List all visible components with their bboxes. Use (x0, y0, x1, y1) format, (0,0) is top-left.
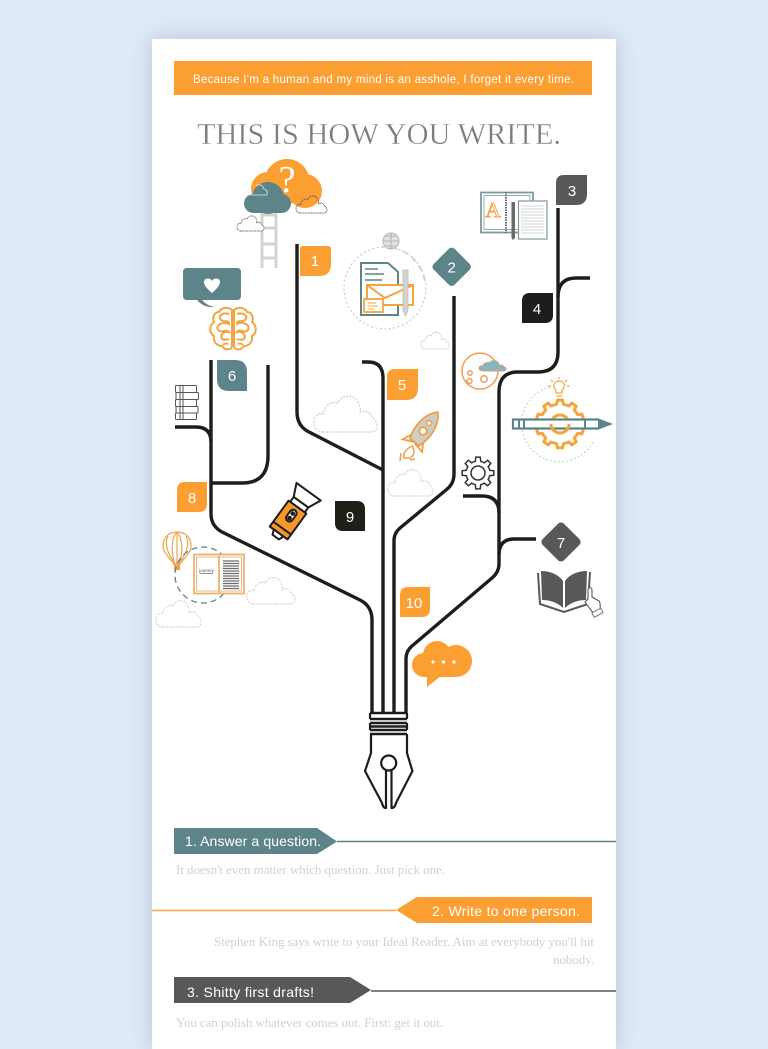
icon: notebook and paper (481, 192, 547, 240)
section 1 text: It doesn't even matter which question. Just pick one. (176, 862, 445, 877)
flag 4 (522, 293, 553, 323)
title: THIS IS HOW YOU WRITE. (197, 116, 561, 151)
icon: open book with hand (538, 571, 603, 617)
icon: brain (210, 308, 256, 349)
flag 1 (300, 246, 331, 276)
icon: small pale cloud (421, 332, 449, 349)
icon: flashlight (264, 483, 321, 546)
white card (152, 39, 616, 1049)
icon: hot air balloon (163, 532, 191, 570)
section 2 heading (152, 897, 592, 923)
flag 1: 1 (311, 253, 319, 270)
flag 5: 5 (398, 377, 406, 394)
section 2 text (214, 934, 594, 967)
icon: open journal in dashed circle: journey (198, 568, 215, 573)
section 1 heading (174, 828, 616, 854)
flag 8 (177, 482, 207, 512)
section 1 heading: 1. Answer a question. (185, 833, 321, 849)
section 2 text: Stephen King says write to your Ideal Reader. Aim at everybody you'll hit (214, 934, 594, 949)
icon: rocket (400, 405, 447, 461)
icon: document, envelope and pen in dashed circle (344, 233, 426, 329)
flag 5 (387, 369, 418, 400)
flag 4: 4 (533, 301, 541, 318)
section 3 heading (174, 977, 616, 1003)
flag 9: 9 (346, 509, 354, 526)
top banner (174, 61, 592, 95)
icon: question clouds and ladder (237, 159, 327, 268)
flag 9 (335, 501, 365, 531)
icon: notebook and paper: A (485, 198, 501, 222)
flag 10: 10 (406, 595, 422, 612)
diamond 7 (540, 521, 582, 563)
section 3 text: You can polish whatever comes out. First: get it out. (176, 1015, 443, 1030)
fountain pen nib (365, 713, 412, 808)
top banner: Because I'm a human and my mind is an asshole, I forget it every time. (193, 74, 574, 86)
flag 8: 8 (188, 490, 196, 507)
section 2 heading: 2. Write to one person. (432, 903, 580, 919)
icon: open journal in dashed circle (175, 547, 244, 603)
icon: question clouds and ladder: ? (279, 159, 295, 201)
flag 3: 3 (568, 183, 576, 200)
diamond 7: 7 (557, 535, 565, 552)
flag 6: 6 (228, 368, 236, 385)
icon: stack of books (176, 386, 198, 420)
icon: orange speech cloud (412, 641, 472, 687)
section 3 heading: 3. Shitty first drafts! (187, 984, 314, 1000)
icon: heart speech bubble (183, 268, 241, 307)
icon: black gear (462, 457, 494, 489)
diamond 2 (431, 246, 473, 288)
flag 10 (400, 587, 430, 617)
icon: palette (462, 353, 506, 389)
icon: dashed clouds (156, 396, 433, 627)
section 2 text: nobody. (553, 952, 594, 967)
flag 6 (217, 360, 247, 391)
diamond 2: 2 (448, 260, 456, 276)
icon: gear with pencil and light bulb (513, 377, 610, 462)
tree of branching lines (175, 208, 590, 713)
flag 3 (556, 175, 587, 205)
